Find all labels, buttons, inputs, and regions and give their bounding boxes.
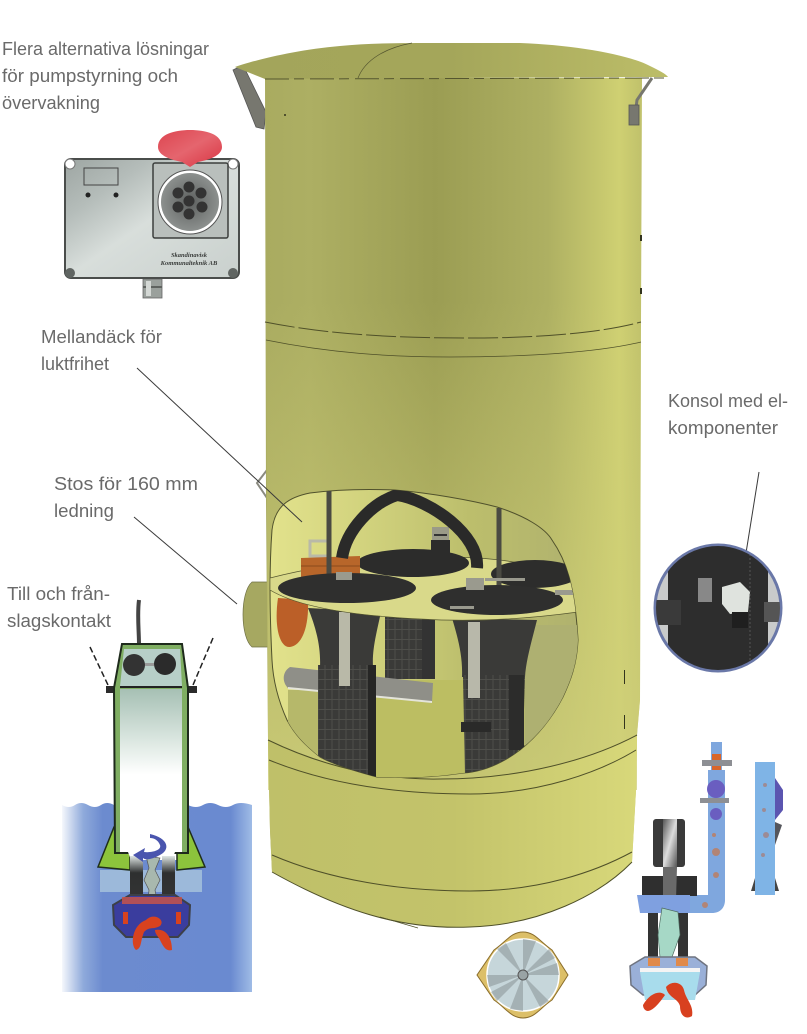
orange bucket <box>301 541 360 577</box>
intermediate deck <box>270 557 580 620</box>
gold frame <box>477 932 568 1018</box>
window fill <box>270 489 578 778</box>
label: intermediate deck: Mellandäck för <box>41 327 162 347</box>
lower legs <box>648 913 688 957</box>
side pipe section <box>751 762 783 895</box>
L pipe <box>690 742 725 913</box>
front plate right <box>431 585 563 615</box>
tank lid <box>235 43 668 79</box>
label: float switch: slagskontakt <box>7 611 111 631</box>
left handle <box>233 65 266 129</box>
brand text: Kommunalteknik AB <box>160 260 218 267</box>
upper orange <box>648 958 688 966</box>
back plate left <box>357 549 469 577</box>
pipe purple <box>707 780 725 820</box>
impeller tails <box>643 983 692 1018</box>
back plate right <box>491 560 579 588</box>
lower section <box>268 735 637 927</box>
brand text <box>160 252 218 267</box>
float switch diagram <box>62 600 252 992</box>
tank body <box>265 78 642 927</box>
display <box>84 168 118 185</box>
corner screws <box>65 159 238 278</box>
rotation arrow <box>133 834 166 862</box>
red cap <box>158 130 222 167</box>
pump left <box>308 608 381 780</box>
screw <box>144 856 160 900</box>
indicator lights <box>86 192 118 198</box>
impeller <box>123 912 181 950</box>
hose <box>342 495 477 568</box>
fittings <box>336 572 575 609</box>
blue band <box>637 895 690 913</box>
label: control options: övervakning <box>2 93 100 113</box>
brand text: Skandinavisk <box>171 252 208 259</box>
control box <box>65 130 239 298</box>
impeller housing <box>113 895 190 937</box>
motor <box>653 819 685 867</box>
orange elbow <box>277 598 308 647</box>
label: control options <box>2 39 209 113</box>
label: console <box>668 391 788 438</box>
screw <box>658 908 680 957</box>
pipe stub <box>243 582 270 647</box>
clamps <box>700 760 732 803</box>
label: intermediate deck <box>41 327 162 374</box>
top band <box>122 897 182 904</box>
label: float switch: Till och från- <box>7 584 110 604</box>
icon: cable gland <box>143 279 162 298</box>
pump right <box>452 618 537 775</box>
inner chamber <box>640 972 700 1000</box>
divider <box>640 968 700 972</box>
lower bracket <box>257 470 267 498</box>
grey pipe <box>284 667 433 703</box>
small marks <box>284 114 642 729</box>
front plate left <box>278 573 416 603</box>
lid seam <box>265 43 665 79</box>
head chamber <box>120 649 182 687</box>
body shading <box>266 300 641 790</box>
label: float switch <box>7 584 111 631</box>
floor tints <box>288 625 580 780</box>
dashed lines <box>90 638 213 685</box>
label: console: Konsol med el- <box>668 391 788 411</box>
skirt <box>98 827 205 870</box>
label: intermediate deck: luktfrihet <box>41 354 109 374</box>
bottom housing <box>630 957 707 995</box>
label: pipe connection: ledning <box>54 501 114 521</box>
socket <box>153 163 228 238</box>
upper flange <box>642 876 697 896</box>
disc blades <box>487 939 559 1011</box>
tank <box>233 43 668 928</box>
label: pipe connection: Stos för 160 mm <box>54 474 198 494</box>
label: pipe connection <box>54 474 198 521</box>
center fitting <box>431 527 450 552</box>
housing <box>114 644 188 853</box>
box panel <box>65 159 239 278</box>
pipe orange <box>712 754 721 770</box>
rear pump <box>385 615 435 679</box>
neck <box>130 856 175 898</box>
shaft <box>663 867 677 915</box>
cable <box>136 600 141 645</box>
disc <box>487 939 559 1011</box>
impeller disc <box>477 932 568 1018</box>
leader lines <box>134 368 759 604</box>
ripple area <box>100 870 202 892</box>
label: control options: Flera alternativa lösningar <box>2 39 209 59</box>
inner tube <box>120 689 182 860</box>
cutaway window <box>270 489 580 780</box>
label: console: komponenter <box>668 418 778 438</box>
flange <box>106 686 197 693</box>
label: control options: för pumpstyrning och <box>2 66 178 86</box>
hub <box>518 970 528 980</box>
pump cutaway <box>630 742 732 1018</box>
right handle <box>629 78 652 125</box>
vertical rods <box>329 490 499 590</box>
water <box>62 803 252 992</box>
tank seams <box>265 322 641 928</box>
console inset <box>655 545 784 675</box>
pipe texture <box>702 833 720 908</box>
